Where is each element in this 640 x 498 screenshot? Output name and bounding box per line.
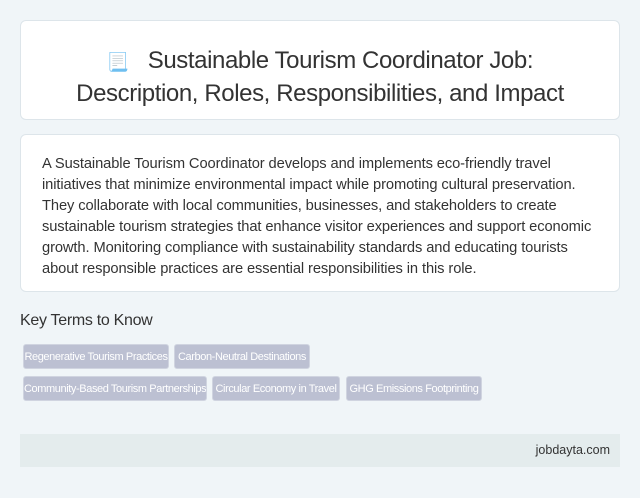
description text: initiatives that minimize environmental impact while promoting cultural preservation.	[42, 177, 576, 193]
title card	[20, 20, 620, 120]
description text: They collaborate with local communities, businesses, and stakeholders to create	[42, 198, 557, 214]
description card	[20, 134, 620, 292]
tag: Community-Based Tourism Partnerships	[24, 383, 206, 395]
tag	[346, 376, 482, 401]
tag: Carbon-Neutral Destinations	[178, 351, 306, 363]
key terms heading: Key Terms to Know	[20, 312, 152, 329]
tag	[174, 344, 310, 369]
description text: A Sustainable Tourism Coordinator develops and implements eco-friendly travel	[42, 156, 551, 172]
footer	[20, 434, 620, 467]
description text: about responsible practices are essential responsibilities in this role.	[42, 261, 476, 277]
description text	[42, 156, 591, 277]
tag: GHG Emissions Footprinting	[350, 383, 478, 395]
description text: sustainable tourism strategies that enhance visitor experiences and support economic	[42, 219, 591, 235]
title: Description, Roles, Responsibilities, and Impact	[76, 80, 564, 107]
description text: growth. Monitoring compliance with sustainability standards and educating tourists	[42, 240, 568, 256]
tag: Circular Economy in Travel	[215, 383, 337, 395]
title	[76, 47, 564, 107]
tag	[23, 376, 207, 401]
tag	[23, 344, 169, 369]
tag: Regenerative Tourism Practices	[24, 351, 168, 363]
footer text: jobdayta.com	[536, 443, 610, 457]
title: 📃 Sustainable Tourism Coordinator Job:	[107, 47, 533, 74]
tag	[212, 376, 340, 401]
